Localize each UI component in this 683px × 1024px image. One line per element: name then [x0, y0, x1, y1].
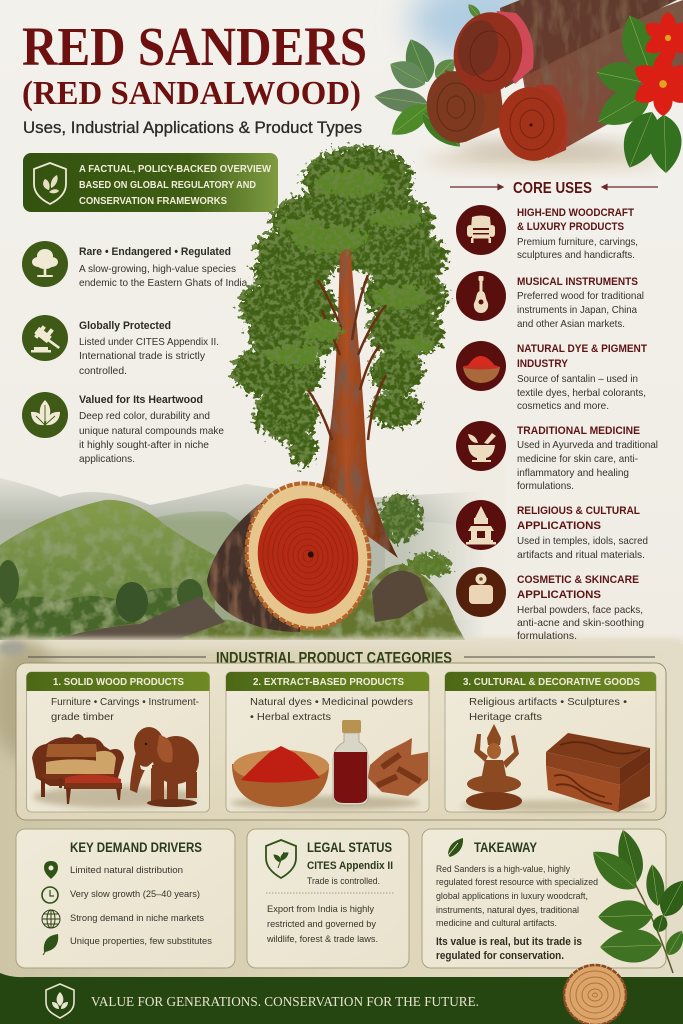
core use: medicine: TRADITIONAL MEDICINE — [517, 425, 640, 437]
core uses heading — [450, 180, 658, 197]
core use: religious: APPLICATIONS — [517, 520, 601, 532]
core use: medicine: formulations. — [517, 480, 574, 492]
core use: instruments: Preferred wood for traditional — [517, 290, 644, 302]
illustration: bottle — [333, 720, 368, 805]
core use: religious: artifacts and ritual materials. — [517, 549, 645, 561]
icon: armchair — [456, 205, 506, 255]
logs and flowers — [373, 0, 683, 174]
core use: dye: cosmetics and more. — [517, 400, 609, 412]
icon: gavel — [22, 315, 68, 361]
card: solid wood: Furniture • Carvings • Instrument- — [51, 696, 199, 708]
card: legal status: CITES Appendix II — [307, 860, 393, 872]
left fact: protected: Globally Protected — [79, 320, 171, 332]
card: cultural goods: 3. CULTURAL & DECORATIVE GOODS — [463, 676, 640, 688]
foreground ground mound — [55, 494, 465, 640]
icon: jar — [456, 567, 506, 617]
icon: mortar — [456, 421, 506, 471]
card: solid wood: grade timber — [51, 711, 115, 723]
foliage back — [232, 146, 447, 466]
banner text — [79, 163, 271, 207]
heading: INDUSTRIAL PRODUCT CATEGORIES — [216, 650, 452, 667]
banner text: BASED ON GLOBAL REGULATORY AND — [79, 179, 256, 191]
card: takeaway: regulated forest resource with specialized — [436, 877, 598, 888]
banner text: CONSERVATION FRAMEWORKS — [79, 195, 227, 207]
core use: woodcraft: Premium furniture, carvings, — [517, 236, 638, 248]
card: key demand drivers: Limited natural distribution — [70, 865, 183, 876]
core use: woodcraft: & LUXURY PRODUCTS — [517, 221, 624, 233]
core use: woodcraft: sculptures and handicrafts. — [517, 249, 635, 261]
icon: clock — [42, 887, 58, 903]
card: extract based: Natural dyes • Medicinal powders — [250, 696, 413, 708]
left fact: heartwood: it highly sought-after in niche — [79, 439, 209, 451]
core use: instruments: and other Asian markets. — [517, 318, 625, 330]
illustration: carved box — [546, 733, 650, 812]
left fact: rare: A slow-growing, high-value species — [79, 263, 236, 275]
core use: dye: textile dyes, herbal colorants, — [517, 387, 646, 399]
card: key demand drivers: Unique properties, few substitutes — [70, 936, 212, 947]
card: solid wood — [26, 672, 210, 812]
card: legal status: Export from India is highly — [267, 904, 374, 915]
illustration: wood chips — [368, 738, 428, 796]
outer panel — [16, 663, 666, 820]
log: back lower — [421, 67, 505, 147]
card: key demand drivers — [16, 829, 235, 968]
card: key demand drivers: KEY DEMAND DRIVERS — [70, 840, 202, 855]
footer band — [0, 965, 683, 1024]
core use: dye: Source of santalin – used in — [517, 373, 638, 385]
section: industrial product categories — [16, 650, 666, 820]
icon: leaf — [43, 934, 58, 955]
ground under logs — [425, 151, 665, 169]
core use: religious: Used in temples, idols, sacred — [517, 535, 648, 547]
subtitle: Uses, Industrial Applications & Product Types — [23, 119, 362, 137]
parchment lower background — [0, 638, 683, 984]
title: (RED SANDALWOOD) — [22, 75, 361, 112]
core use: cosmetic: COSMETIC & SKINCARE — [517, 574, 639, 586]
wood slice — [564, 965, 626, 1024]
icon: shield — [34, 163, 66, 204]
card: key demand drivers: Strong demand in niche markets — [70, 913, 204, 924]
core use: medicine: Used in Ayurveda and traditional — [517, 439, 658, 451]
title — [22, 16, 367, 112]
left fact: rare: Rare • Endangered • Regulated — [79, 246, 231, 258]
foliage highlights — [264, 168, 432, 365]
card: takeaway: regulated for conservation. — [436, 950, 564, 962]
mountain landscape — [0, 460, 505, 650]
core use: dye: NATURAL DYE & PIGMENT — [517, 343, 647, 355]
icon: globe — [42, 910, 60, 928]
card: extract based: • Herbal extracts — [250, 711, 331, 723]
log: top — [446, 0, 677, 100]
left fact: rare: endemic to the Eastern Ghats of India. — [79, 277, 250, 289]
card: takeaway: medicine and cultural artifacts. — [436, 918, 557, 929]
icon: shield — [46, 984, 74, 1018]
icon: pin — [44, 861, 58, 879]
core use: instruments — [456, 271, 644, 330]
core use: instruments: MUSICAL INSTRUMENTS — [517, 276, 638, 288]
card: takeaway: Its value is real, but its trade is — [436, 936, 582, 948]
core use: woodcraft — [456, 205, 638, 261]
card: takeaway: instruments, natural dyes, traditional — [436, 905, 579, 916]
core use: cosmetic: formulations. — [517, 630, 577, 642]
core use: medicine: inflammatory and healing — [517, 467, 629, 479]
flowers with leaves — [590, 10, 683, 174]
card: extract based: 2. EXTRACT-BASED PRODUCTS — [253, 676, 404, 688]
illustration: bowl of red powder — [232, 746, 329, 807]
illustration: elephant — [130, 727, 199, 807]
card: legal status: LEGAL STATUS — [307, 840, 392, 855]
log: lower right — [492, 0, 683, 167]
card: takeaway: TAKEAWAY — [474, 840, 537, 855]
illustration: sofa — [32, 734, 124, 797]
tree illustration — [232, 146, 447, 558]
trunk — [308, 245, 398, 558]
left fact: heartwood: applications. — [79, 453, 135, 465]
left fact: heartwood: unique natural compounds make — [79, 425, 224, 437]
core use: dye — [456, 341, 647, 412]
green branch — [584, 827, 683, 973]
icon: guitar — [456, 271, 506, 321]
core use: cosmetic: APPLICATIONS — [517, 589, 601, 601]
left fact: heartwood: Deep red color, durability and — [79, 410, 210, 422]
card: takeaway: global applications in luxury woodcraft, — [436, 891, 588, 902]
sky behind logs — [410, 0, 550, 62]
core uses heading: CORE USES — [513, 180, 592, 197]
core use: woodcraft: HIGH-END WOODCRAFT — [517, 207, 634, 219]
core use: instruments: instruments in Japan, China — [517, 304, 637, 316]
icon: temple — [456, 500, 506, 550]
card: takeaway: Red Sanders is a high-value, highly — [436, 864, 570, 875]
card: solid wood: 1. SOLID WOOD PRODUCTS — [53, 676, 184, 688]
card: legal status: restricted and governed by — [267, 919, 376, 930]
core use: cosmetic: Herbal powders, face packs, — [517, 604, 643, 616]
leaves behind logs — [373, 2, 483, 154]
left fact: rare — [22, 241, 250, 289]
card: key demand drivers: Very slow growth (25–40 years) — [70, 889, 200, 900]
icon: leaf — [446, 838, 463, 858]
core use: cosmetic — [456, 567, 644, 642]
log slice — [207, 474, 381, 638]
core use: medicine — [456, 421, 658, 492]
card: extract based — [226, 672, 429, 812]
footer band: VALUE FOR GENERATIONS. CONSERVATION FOR THE FUTURE. — [91, 995, 479, 1010]
core use: medicine: medicine for skin care, anti- — [517, 453, 638, 465]
banner text: A FACTUAL, POLICY-BACKED OVERVIEW — [79, 163, 271, 175]
card: cultural goods: Religious artifacts • Sculptures • — [469, 696, 627, 708]
illustration: table — [64, 774, 122, 804]
left fact: protected: controlled. — [79, 365, 127, 377]
icon: shield with leaf — [266, 840, 296, 878]
card: takeaway — [422, 829, 666, 968]
card: cultural goods: Heritage crafts — [469, 711, 542, 723]
left fact: protected: International trade is strictly — [79, 350, 206, 362]
core use: religious — [456, 500, 648, 561]
icon: tree — [22, 241, 68, 287]
left fact: heartwood: Valued for Its Heartwood — [79, 394, 203, 406]
illustration: deity statue — [466, 724, 522, 810]
banner: overview — [23, 153, 278, 212]
card: legal status: wildlife, forest & trade laws. — [266, 934, 378, 945]
core use: cosmetic: anti-acne and skin-soothing — [517, 617, 644, 629]
core use: religious: RELIGIOUS & CULTURAL — [517, 505, 640, 517]
left fact: protected — [22, 315, 219, 377]
left fact: protected: Listed under CITES Appendix II. — [79, 336, 219, 348]
card: legal status — [247, 829, 409, 968]
card: legal status: Trade is controlled. — [307, 876, 380, 887]
title: RED SANDERS — [22, 16, 367, 77]
core use: dye: INDUSTRY — [517, 358, 569, 370]
left fact: heartwood — [22, 392, 224, 465]
icon: leaves — [22, 392, 68, 438]
icon: powder bowl — [456, 341, 506, 391]
card: cultural goods — [445, 672, 656, 812]
